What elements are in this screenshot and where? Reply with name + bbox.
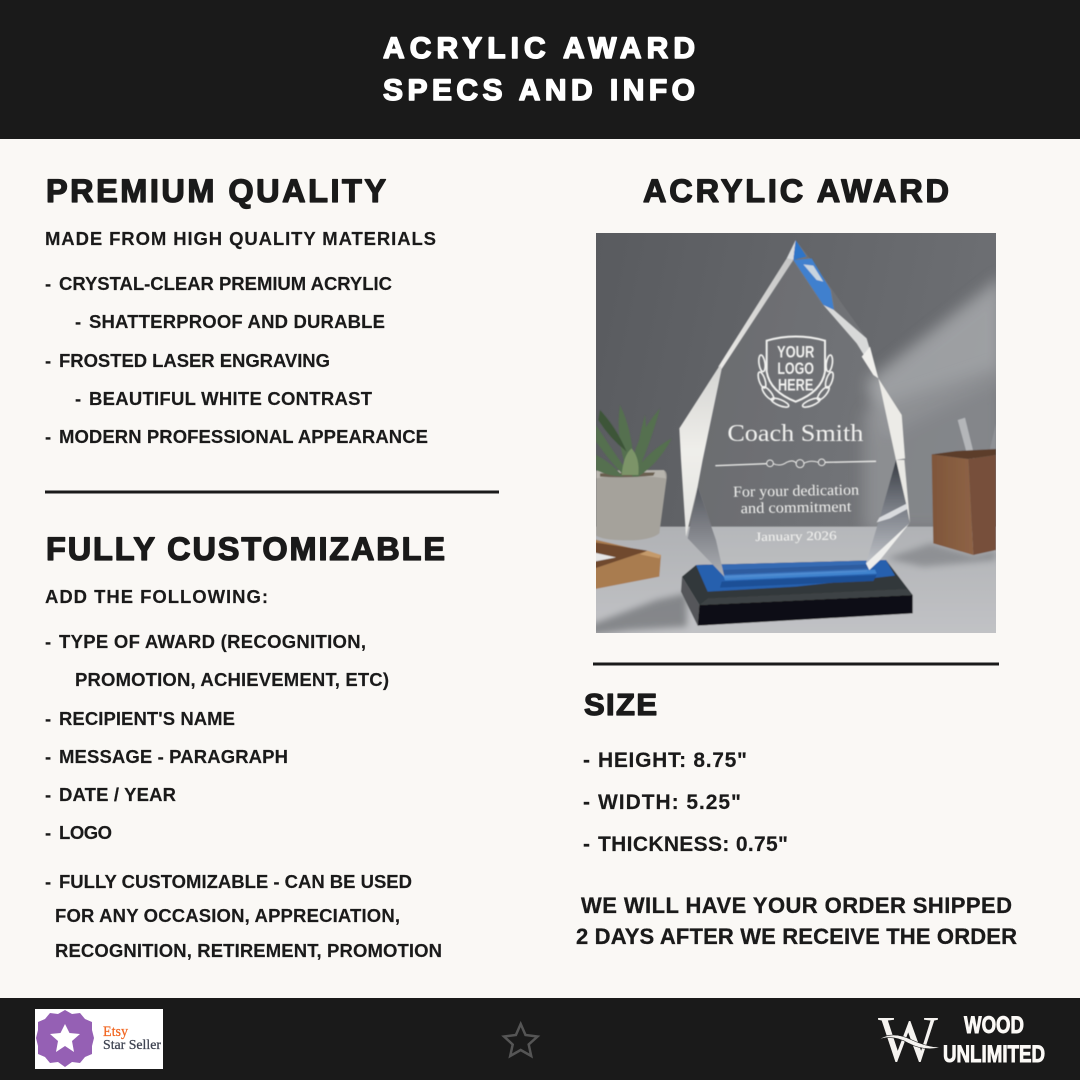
panel: fully customizable: RECIPIENT'S NAME (59, 708, 235, 729)
panel: fully customizable: ADD THE FOLLOWING: (45, 586, 268, 607)
panel: fully customizable: - (45, 784, 51, 805)
header banner (0, 0, 1080, 139)
panel: fully customizable: RECOGNITION, RETIREMENT, PROMOTION (55, 940, 442, 961)
badge: etsy star seller: Star Seller (103, 1037, 162, 1052)
footer bar (0, 998, 1080, 1080)
heading: acrylic award: ACRYLIC AWARD (643, 173, 949, 209)
badge: etsy star seller: Etsy (103, 1024, 128, 1040)
header banner: SPECS AND INFO (383, 74, 695, 107)
photo: ornament divider (715, 459, 876, 468)
panel: premium quality: - (45, 426, 51, 447)
panel: premium quality (45, 173, 436, 447)
shipping note (576, 893, 1017, 949)
product photo: acrylic award (596, 233, 996, 633)
panel: size: WIDTH: 5.25" (598, 791, 741, 814)
shipping note: 2 DAYS AFTER WE RECEIVE THE ORDER (576, 924, 1017, 949)
photo: engraved message: and commitment (741, 498, 852, 517)
panel: fully customizable: LOGO (59, 822, 112, 843)
panel: fully customizable: TYPE OF AWARD (RECOGNITION, (59, 631, 366, 652)
panel: fully customizable: MESSAGE - PARAGRAPH (59, 746, 288, 767)
panel: premium quality: - (45, 273, 51, 294)
panel: premium quality: - (75, 311, 81, 332)
panel: premium quality: MODERN PROFESSIONAL APPEARANCE (59, 426, 428, 447)
logo: wood unlimited (878, 1003, 1045, 1076)
photo: engraved name: Coach Smith (727, 421, 863, 447)
panel: premium quality: - (45, 350, 51, 371)
photo: pencil cup (886, 418, 996, 567)
panel: fully customizable: DATE / YEAR (59, 784, 176, 805)
icon: star outline (504, 1024, 538, 1056)
panel: fully customizable: - (45, 631, 51, 652)
photo: potted plant (596, 405, 672, 540)
panel: size: - (583, 791, 590, 814)
panel: fully customizable: - (45, 746, 51, 767)
panel: premium quality: MADE FROM HIGH QUALITY MATERIALS (45, 228, 436, 249)
photo: crystal award (679, 240, 910, 578)
panel: fully customizable: PROMOTION, ACHIEVEMENT, ETC) (75, 669, 389, 690)
photo: engraved message: For your dedication (733, 482, 859, 501)
panel: premium quality: - (75, 388, 81, 409)
photo: logo engraving: LOGO (777, 359, 814, 378)
panel: premium quality: FROSTED LASER ENGRAVING (59, 350, 330, 371)
panel: fully customizable: FULLY CUSTOMIZABLE (46, 531, 445, 567)
photo: logo engraving (757, 336, 835, 409)
logo: wood unlimited: W (878, 1003, 939, 1076)
panel: fully customizable: FOR ANY OCCASION, APPRECIATION, (55, 905, 400, 926)
panel: size: - (583, 749, 590, 772)
panel: size: - (583, 833, 590, 856)
photo: engraved message: January 2026 (755, 529, 837, 544)
panel: fully customizable: - (45, 871, 51, 892)
badge: etsy star seller (35, 1009, 163, 1069)
shipping note: WE WILL HAVE YOUR ORDER SHIPPED (581, 893, 1012, 918)
photo: logo engraving: HERE (778, 375, 813, 394)
logo: wood unlimited: WOOD (964, 1012, 1024, 1039)
panel: size: THICKNESS: 0.75" (598, 833, 788, 856)
panel: premium quality: SHATTERPROOF AND DURABLE (89, 311, 385, 332)
panel: premium quality: PREMIUM QUALITY (46, 173, 386, 209)
panel: premium quality: BEAUTIFUL WHITE CONTRAST (89, 388, 373, 409)
photo: logo engraving: YOUR (777, 343, 814, 362)
photo: wooden tray (590, 538, 661, 590)
panel: fully customizable (45, 531, 445, 961)
panel: fully customizable: - (45, 822, 51, 843)
photo: base shadow (590, 593, 687, 635)
panel: premium quality: CRYSTAL-CLEAR PREMIUM ACRYLIC (59, 273, 392, 294)
panel: size: SIZE (584, 687, 657, 722)
logo: wood unlimited: UNLIMITED (943, 1041, 1045, 1068)
photo: trophy base (681, 560, 913, 626)
header banner: ACRYLIC AWARD (383, 32, 695, 65)
panel: size: HEIGHT: 8.75" (598, 749, 747, 772)
photo: engraved message (733, 482, 859, 544)
panel: size (583, 687, 788, 856)
panel: fully customizable: FULLY CUSTOMIZABLE - CAN BE USED (59, 871, 412, 892)
panel: fully customizable: - (45, 708, 51, 729)
